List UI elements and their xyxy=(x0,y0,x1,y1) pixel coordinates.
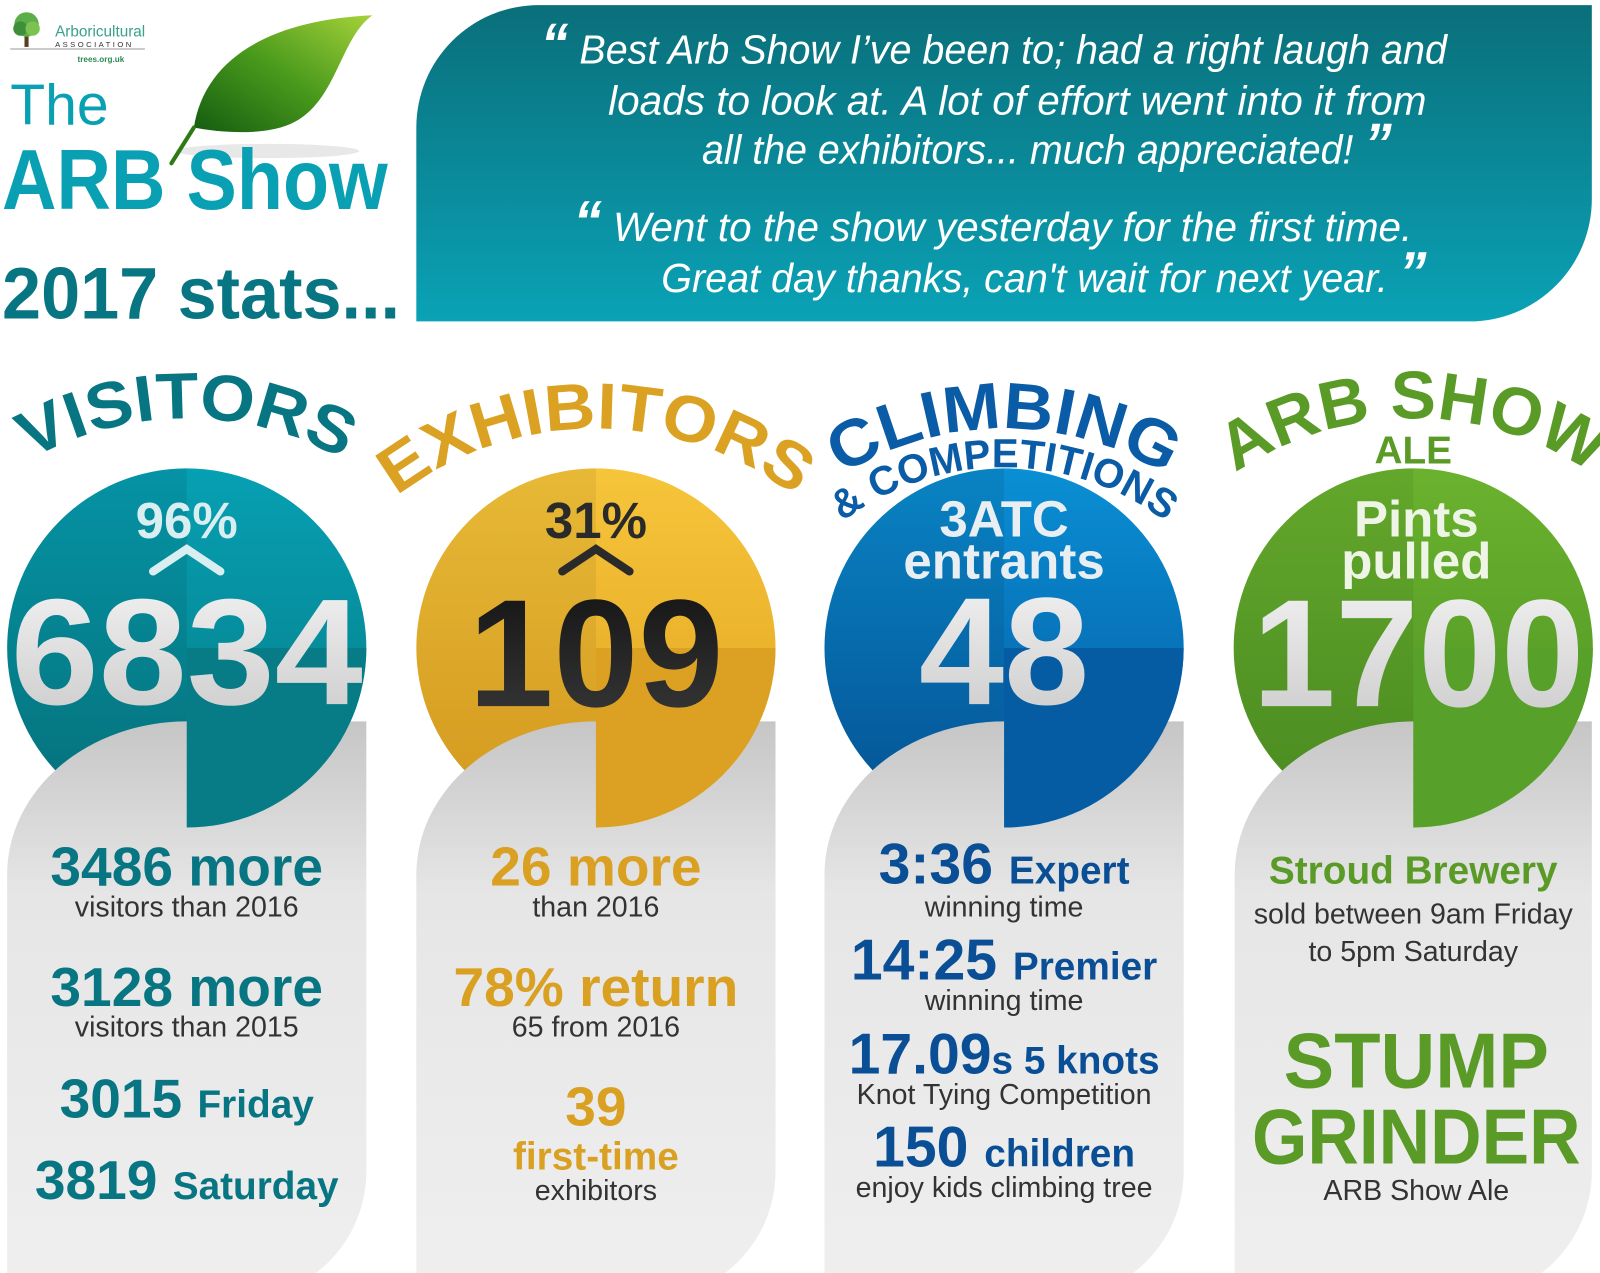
big number 1700: 1700 xyxy=(1253,568,1584,739)
icon: leaf xyxy=(171,15,372,163)
panel: visitors xyxy=(7,373,366,1273)
logo: Arboricultural Association: trees.org.uk xyxy=(78,55,125,64)
quote 2: Great day thanks, can't wait for next year. ” xyxy=(661,241,1427,305)
visitors stats: 3128 more xyxy=(50,956,323,1018)
climbing stats: winning time xyxy=(924,891,1083,923)
visitors stats: 3486 more xyxy=(50,836,323,898)
ale stats: to 5pm Saturday xyxy=(1308,936,1519,968)
label: 3ATC entrants: entrants xyxy=(903,533,1105,590)
ale stats: ARB Show Ale xyxy=(1323,1175,1509,1207)
exhibitor stats: 26 more xyxy=(490,836,702,898)
exhibitor stats: first-time xyxy=(513,1135,679,1178)
ale stats: Stroud Brewery xyxy=(1269,850,1558,893)
logo: Arboricultural Association: ASSOCIATION xyxy=(55,40,134,49)
label: pints pulled: pulled xyxy=(1341,533,1491,590)
panel: testimonials banner xyxy=(416,5,1592,321)
visitors stats: 3819 Saturday xyxy=(35,1149,339,1211)
ale stats: STUMP xyxy=(1284,1019,1549,1105)
visitors stats: 3015 Friday xyxy=(60,1067,314,1129)
heading: VISITORS: VISITORS xyxy=(12,373,355,453)
ale stats xyxy=(1252,850,1581,1207)
big number 48: 48 xyxy=(919,566,1089,737)
climbing stats: 14:25 Premier xyxy=(851,929,1157,993)
quote 1: loads to look at. A lot of effort went into it from xyxy=(608,77,1427,123)
label: pints pulled: Pints xyxy=(1354,491,1479,548)
card: climbing xyxy=(824,721,1184,1273)
climbing stats: Knot Tying Competition xyxy=(857,1079,1151,1111)
quote 1 xyxy=(541,12,1448,176)
circle: visitors xyxy=(7,468,366,828)
climbing stats: 150 children xyxy=(873,1115,1135,1179)
label: 3ATC entrants: 3ATC xyxy=(939,491,1069,548)
label: pints pulled xyxy=(1341,491,1491,590)
stat: 31% increase: 31% xyxy=(545,492,647,549)
exhibitor stats: 39 xyxy=(565,1076,627,1138)
label: 3ATC entrants xyxy=(903,491,1105,590)
quote 1: all the exhibitors... much appreciated! ” xyxy=(702,112,1392,176)
panel: exhibitors xyxy=(375,384,812,1273)
heading: EXHIBITORS: EXHIBITORS xyxy=(375,384,812,494)
title: The xyxy=(10,73,109,137)
title xyxy=(2,73,400,334)
title: 2017 stats... xyxy=(2,251,400,334)
big number 109: 109 xyxy=(468,568,723,739)
big number 6834: 6834 xyxy=(11,568,363,737)
ale stats: GRINDER xyxy=(1252,1094,1581,1180)
visitors stats xyxy=(35,836,339,1211)
exhibitor stats: exhibitors xyxy=(535,1175,657,1207)
climbing stats: 17.09s 5 knots xyxy=(849,1022,1160,1086)
visitors stats: visitors than 2016 xyxy=(75,891,299,923)
quote 1: “ Best Arb Show I’ve been to; had a right laugh and xyxy=(541,12,1448,76)
heading: CLIMBING & COMPETITIONS xyxy=(830,383,1178,518)
climbing stats: enjoy kids climbing tree xyxy=(856,1172,1153,1204)
climbing stats xyxy=(849,833,1160,1204)
visitors stats: visitors than 2015 xyxy=(75,1012,299,1044)
card: visitors xyxy=(7,721,366,1273)
logo: Arboricultural Association: Arboricultural xyxy=(55,24,145,41)
stat: 96% increase: 96% xyxy=(136,492,238,549)
climbing stats: winning time xyxy=(924,985,1083,1017)
exhibitor stats xyxy=(454,836,738,1207)
heading: CLIMBING & COMPETITIONS: & COMPETITIONS xyxy=(834,439,1177,518)
heading: ARB SHOW ALE: ALE xyxy=(1374,429,1452,472)
icon: tree xyxy=(10,12,145,49)
ale stats: sold between 9am Friday xyxy=(1254,898,1574,930)
heading: CLIMBING & COMPETITIONS: CLIMBING xyxy=(830,383,1178,467)
quote 2 xyxy=(573,190,1427,305)
exhibitor stats: than 2016 xyxy=(532,891,659,923)
panel: climbing competitions xyxy=(824,383,1184,1273)
card: exhibitors xyxy=(416,721,776,1273)
quote 2: “ Went to the show yesterday for the first time. xyxy=(573,190,1412,254)
exhibitor stats: 78% return xyxy=(454,956,738,1018)
card: ale xyxy=(1235,721,1592,1273)
exhibitor stats: 65 from 2016 xyxy=(512,1012,680,1044)
circle: exhibitors xyxy=(416,468,776,828)
logo: Arboricultural Association xyxy=(10,12,145,64)
panel: ARB Show Ale xyxy=(1228,371,1600,1273)
climbing stats: 3:36 Expert xyxy=(879,833,1130,897)
circle: climbing xyxy=(824,468,1184,828)
circle: ale xyxy=(1234,468,1593,828)
title: ARB Show xyxy=(2,132,388,228)
